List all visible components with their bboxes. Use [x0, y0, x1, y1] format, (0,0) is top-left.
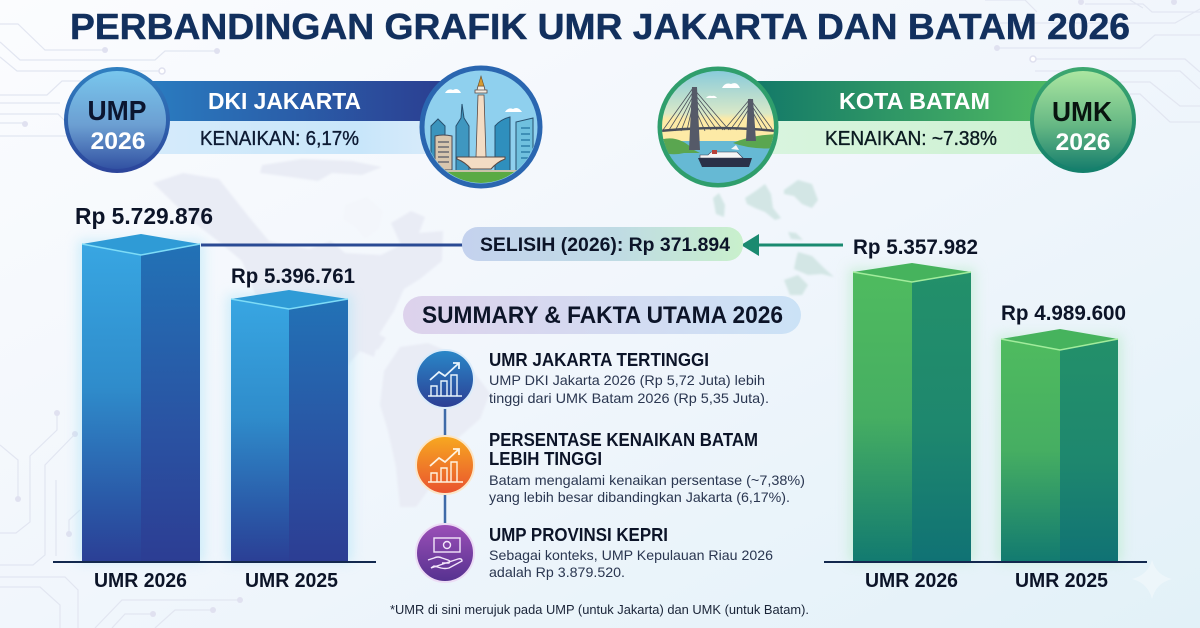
- increase band: [750, 121, 1050, 154]
- title: PERBANDINGAN GRAFIK UMR JAKARTA DAN BATAM 2026: [70, 6, 1130, 47]
- label: UMR 2026: UMR 2026: [94, 570, 187, 592]
- badge: UMP 2026: UMP: [88, 95, 146, 126]
- header band: [150, 81, 450, 121]
- increase band: KENAIKAN: ~7.38%: [825, 128, 997, 150]
- chart: Jakarta bars: [53, 203, 376, 592]
- badge: UMP 2026: 2026: [90, 128, 146, 155]
- sparkle: [1132, 560, 1172, 599]
- header band: [750, 81, 1050, 121]
- heading: summary: [403, 296, 801, 334]
- text: fact 1: UMP DKI Jakarta 2026 (Rp 5,72 Juta) lebih: [489, 372, 765, 388]
- background world map: [153, 159, 490, 507]
- background islands of Kepri: [713, 180, 834, 295]
- text: fact 2: Batam mengalami kenaikan persentase (~7,38%): [489, 472, 805, 488]
- badge: UMK 2026: 2026: [1056, 129, 1110, 156]
- text: fact 1: UMR JAKARTA TERTINGGI: [489, 350, 709, 370]
- fact 2: [416, 430, 805, 505]
- callout: selisih: SELISIH (2026): Rp 371.894: [480, 235, 730, 256]
- value: Jakarta 2025: Rp 5.396.761: [231, 265, 355, 288]
- value: Batam 2025: Rp 4.989.600: [1001, 302, 1126, 325]
- callout: selisih: [462, 227, 743, 261]
- text: fact 3: [489, 525, 773, 580]
- icon: rising chart orange: [416, 436, 474, 494]
- fact 1: [416, 350, 769, 408]
- text: fact 1: [489, 350, 769, 406]
- icon: money in hand: [416, 524, 474, 582]
- text: fact 3: adalah Rp 3.879.520.: [489, 564, 625, 580]
- footnote: *UMR di sini merujuk pada UMP (untuk Jakarta) dan UMK (untuk Batam).: [390, 602, 809, 617]
- bar: Batam UMR 2025: [997, 329, 1122, 562]
- icon: Jakarta skyline with Monas: [422, 68, 540, 188]
- chart: Batam bars: [824, 236, 1147, 592]
- text: fact 3: UMP PROVINSI KEPRI: [489, 525, 668, 545]
- heading: summary: SUMMARY & FAKTA UTAMA 2026: [422, 302, 783, 329]
- bar: Jakarta UMR 2026: [78, 234, 204, 562]
- text: fact 3: Sebagai konteks, UMP Kepulauan Riau 2026: [489, 547, 773, 563]
- label: UMR 2026: UMR 2026: [865, 570, 958, 592]
- text: fact 2: [489, 430, 805, 505]
- value: Jakarta 2026: Rp 5.729.876: [75, 203, 213, 229]
- panel: Jakarta header: [66, 68, 540, 188]
- increase band: KENAIKAN: 6,17%: [200, 128, 359, 150]
- arrow from Batam value: [741, 234, 843, 256]
- connector line from Jakarta bar: [201, 244, 463, 246]
- label: UMR 2025: UMR 2025: [245, 570, 338, 592]
- icon: Batam bridge and ship: [660, 68, 778, 191]
- axis: [824, 561, 1147, 563]
- text: fact 2: yang lebih besar dibandingkan Jakarta (6,17%).: [489, 489, 790, 505]
- text: fact 2: PERSENTASE KENAIKAN BATAM: [489, 430, 758, 450]
- badge: UMK 2026: [1032, 69, 1134, 171]
- region name: DKI JAKARTA: [208, 88, 361, 114]
- label: UMR 2025: UMR 2025: [1015, 570, 1108, 592]
- bar: Batam UMR 2026: [849, 263, 975, 562]
- panel: Batam header: [660, 68, 1134, 191]
- text: fact 1: tinggi dari UMK Batam 2026 (Rp 5,35 Juta).: [489, 390, 769, 406]
- text: fact 2: LEBIH TINGGI: [489, 449, 602, 469]
- axis: [53, 561, 376, 563]
- fact 3: [416, 524, 773, 582]
- region name: KOTA BATAM: [839, 88, 990, 114]
- badge: UMK 2026: UMK: [1052, 96, 1112, 127]
- bar: Jakarta UMR 2025: [227, 290, 352, 562]
- timeline connector: [444, 405, 446, 531]
- value: Batam 2026: Rp 5.357.982: [853, 236, 978, 259]
- icon: rising chart blue: [416, 350, 474, 408]
- badge: UMP 2026: [66, 69, 168, 171]
- increase band: [150, 121, 450, 154]
